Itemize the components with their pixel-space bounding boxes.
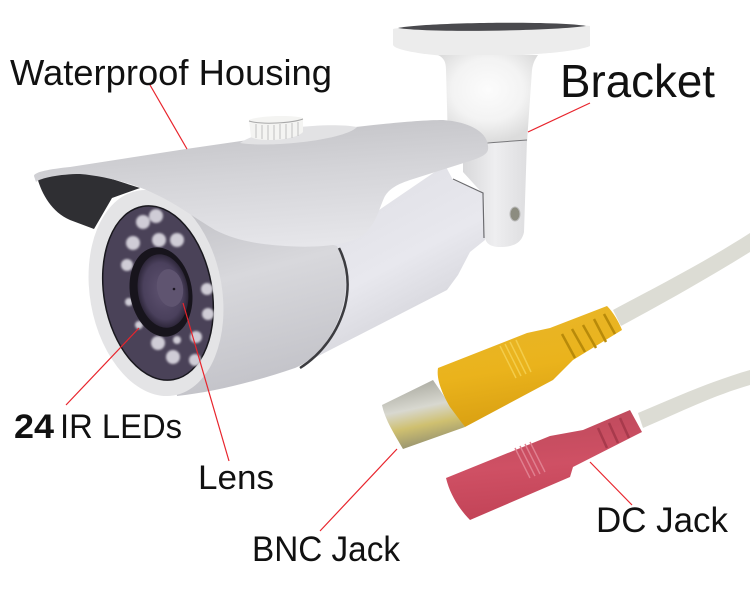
camera knob (240, 116, 357, 145)
icon: BNC cable (382, 233, 750, 449)
bracket: wall mount plate and arm (393, 23, 590, 247)
camera visor (34, 120, 488, 247)
label: Waterproof Housing: Waterproof Housing (10, 52, 332, 93)
front body (150, 190, 346, 396)
metal BNC connector (382, 380, 465, 449)
icon: lens (123, 242, 199, 342)
label: 24 IR LEDs: 24 (14, 408, 54, 446)
red DC plug (446, 410, 642, 520)
front ring and LEDs (73, 179, 239, 407)
label: DC Jack: DC Jack (596, 501, 728, 540)
white BNC cable (613, 233, 750, 326)
yellow boot (438, 306, 622, 427)
callout lines (66, 85, 632, 531)
housing band (300, 248, 348, 368)
white DC cable (638, 370, 750, 428)
rear housing (295, 165, 485, 368)
label: Lens: Lens (198, 459, 274, 497)
icon: DC cable (446, 370, 750, 520)
label: BNC Jack: BNC Jack (252, 530, 400, 569)
label: Bracket: Bracket (560, 55, 715, 107)
label: 24 IR LEDs: IR LEDs (60, 408, 182, 446)
icon: camera illustration (34, 23, 590, 407)
dark visor underside (37, 172, 140, 229)
icon: bracket screw (510, 207, 520, 221)
